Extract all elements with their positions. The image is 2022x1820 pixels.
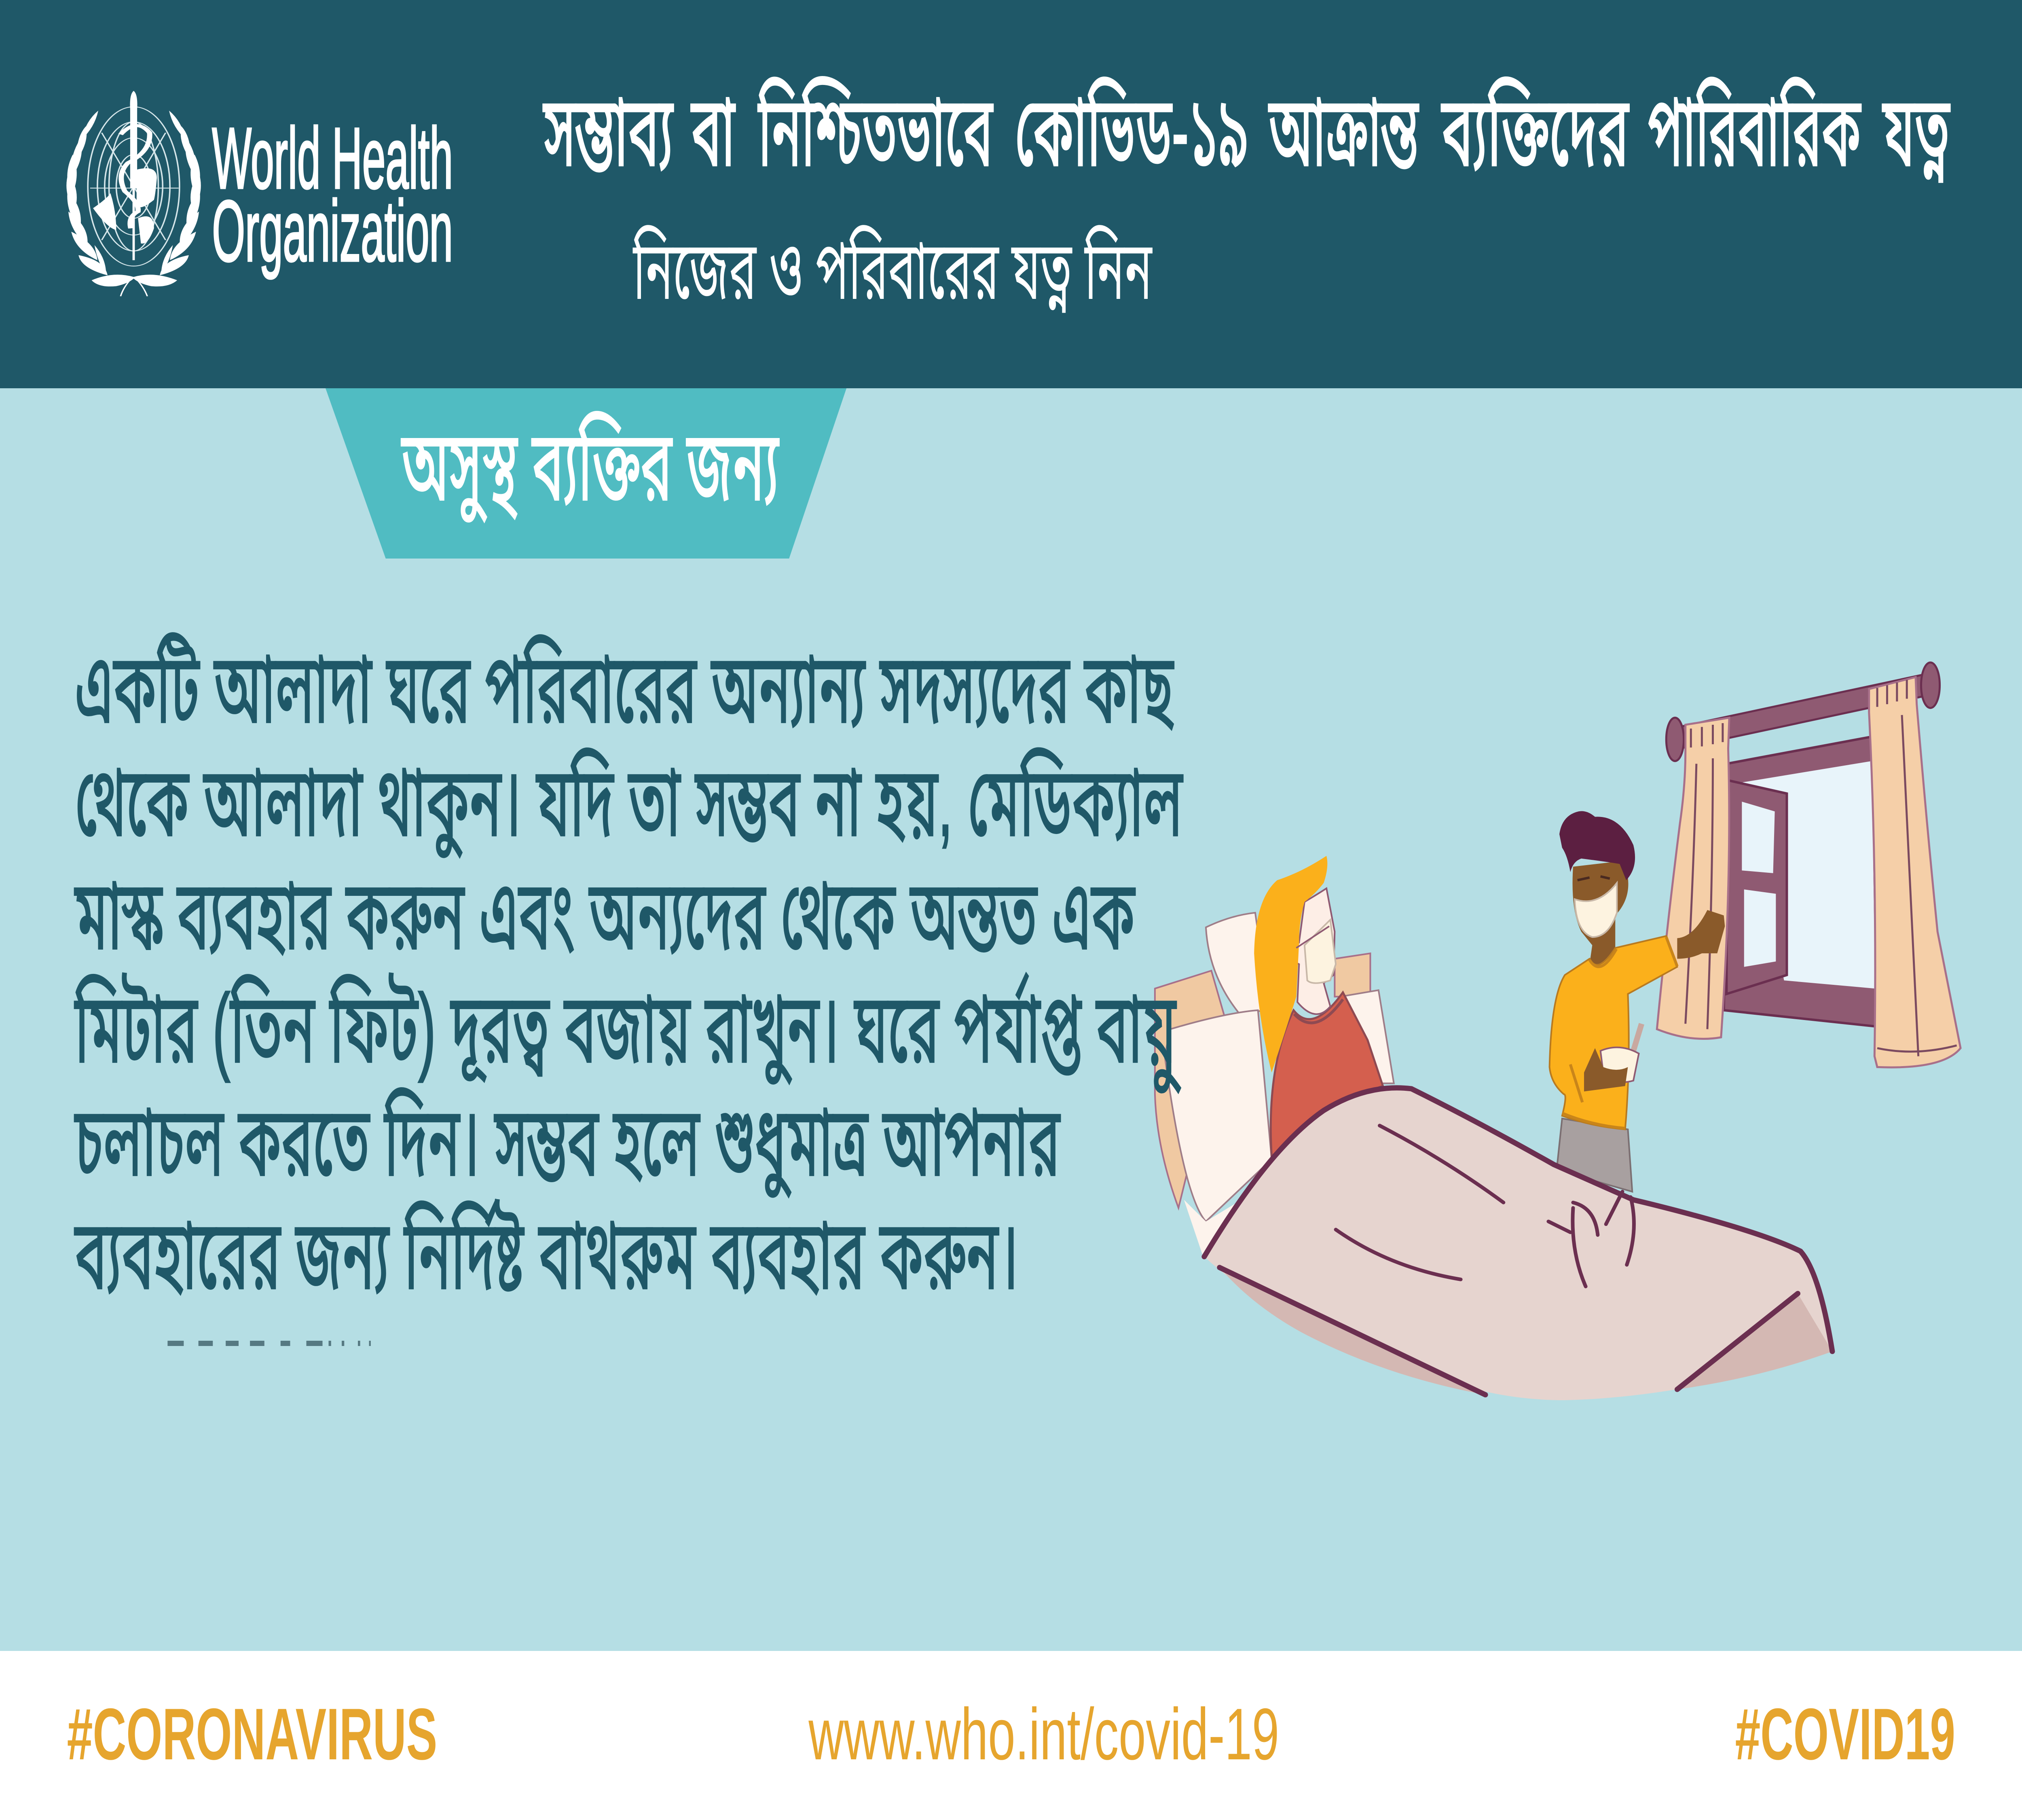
- footer hashtags and url: #COVID19: [1735, 1693, 1955, 1775]
- headboard: [1155, 953, 1370, 1208]
- title: যত্ন: [1882, 77, 1950, 186]
- WHO logo emblem: [66, 91, 201, 296]
- footer hashtags and url: www.who.int/covid-19: [808, 1693, 1279, 1775]
- WHO logo wordmark: [212, 110, 453, 279]
- right curtain: [1869, 677, 1961, 1067]
- body text: একটি আলাদা ঘরে পরিবারের অন্যান্য সদস্যদের কাছ: [75, 633, 1174, 743]
- title: সম্ভাব্য: [543, 77, 674, 186]
- title: বা: [691, 77, 736, 186]
- man: [1550, 811, 1725, 1191]
- illustration: patient in bed, carer opening window: [1155, 662, 1961, 1400]
- body text: মাস্ক ব্যবহার করুন এবং অন্যদের থেকে অন্তত এক: [74, 861, 1136, 970]
- footer hashtags and url: #CORONAVIRUS: [67, 1693, 437, 1775]
- title: [543, 76, 1950, 186]
- section tab: [326, 388, 846, 559]
- header band: [0, 0, 2022, 388]
- body text: থেকে আলাদা থাকুন। যদি তা সম্ভব না হয়, মেডিক্যাল: [75, 747, 1183, 858]
- body text: [74, 633, 1183, 1310]
- blanket: [1204, 1088, 1832, 1400]
- title: নিশ্চিতভাবে: [758, 76, 993, 186]
- subtitle: নিজের ও পরিবারের যত্ন নিন: [632, 225, 1153, 317]
- sheet under blanket: [1184, 1200, 1242, 1257]
- title: আক্রান্ত: [1268, 77, 1419, 186]
- title: ব্যক্তিদের: [1441, 77, 1629, 186]
- title: কোভিড-১৯: [1015, 77, 1248, 186]
- body text: চলাচল করতে দিন। সম্ভব হলে শুধুমাত্র আপনার: [74, 1087, 1061, 1198]
- body text: মিটার (তিন ফিট) দূরত্ব বজায় রাখুন। ঘরে পর্যাপ্ত বায়ু: [74, 972, 1181, 1093]
- cropped text remnant: [167, 1341, 371, 1346]
- section tab: অসুস্থ ব্যক্তির জন্য: [401, 411, 779, 523]
- woman: [1254, 856, 1383, 1156]
- curtain rod: [1666, 662, 1940, 761]
- body text: ব্যবহারের জন্য নির্দিষ্ট বাথরুম ব্যবহার করুন।: [74, 1199, 1019, 1310]
- pillows: [1165, 913, 1394, 1221]
- title: পারিবারিক: [1648, 77, 1861, 186]
- left curtain: [1657, 718, 1729, 1039]
- WHO logo wordmark: World Health: [212, 110, 453, 207]
- footer band: [0, 1651, 2022, 1820]
- footer hashtags and url: [67, 1693, 1955, 1775]
- WHO logo wordmark: Organization: [212, 182, 453, 279]
- window: [1724, 736, 1876, 1026]
